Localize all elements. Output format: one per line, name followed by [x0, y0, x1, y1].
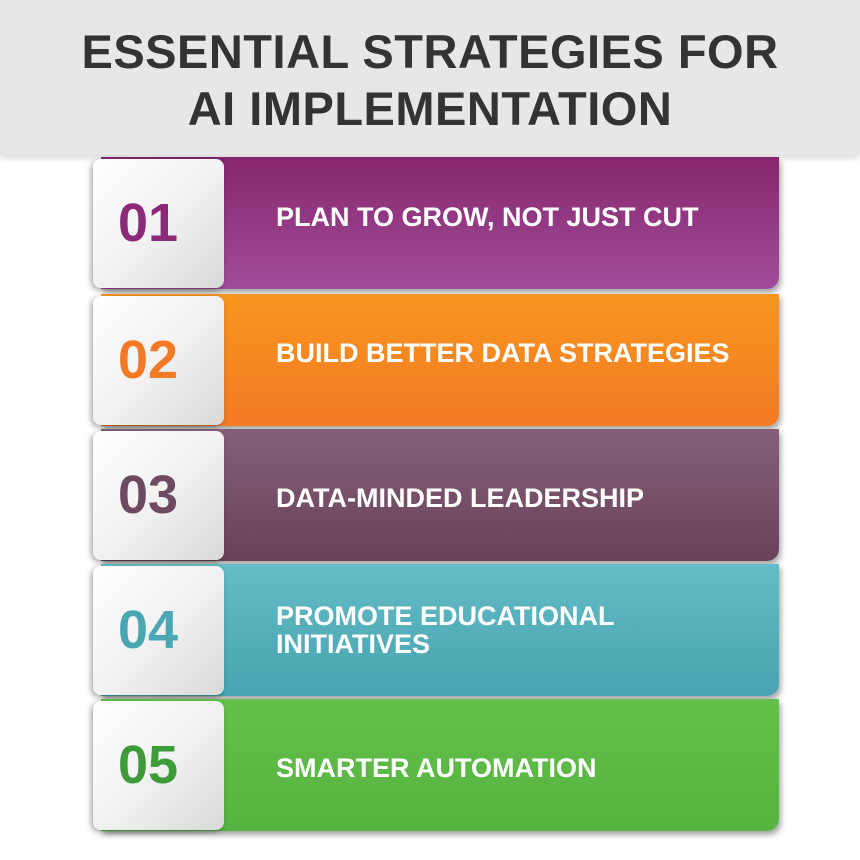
step 05 — [88, 699, 784, 838]
label 02: BUILD BETTER DATA STRATEGIES — [276, 338, 730, 368]
title: AI IMPLEMENTATION — [188, 82, 672, 135]
step 02 — [88, 294, 784, 431]
number box 04: 04 — [118, 600, 178, 660]
number box 03: 03 — [118, 465, 178, 525]
title — [81, 25, 779, 135]
bar 05 — [101, 699, 779, 831]
number box 01 — [93, 159, 224, 288]
number box 04 — [93, 566, 224, 695]
bar 03 — [101, 429, 779, 561]
number box 01: 01 — [118, 193, 178, 253]
bar 01 — [101, 157, 779, 289]
step 04 — [88, 564, 784, 701]
label 04: INITIATIVES — [276, 629, 430, 659]
title: ESSENTIAL STRATEGIES FOR — [81, 25, 779, 78]
number box 05: 05 — [118, 735, 178, 795]
header band — [0, 0, 860, 155]
label 03: DATA-MINDED LEADERSHIP — [276, 483, 644, 513]
label 04 — [276, 601, 614, 659]
label 01: PLAN TO GROW, NOT JUST CUT — [276, 202, 699, 232]
label 04: PROMOTE EDUCATIONAL — [276, 601, 614, 631]
number box 02: 02 — [118, 330, 178, 390]
number box 03 — [93, 431, 224, 560]
step 03 — [88, 429, 784, 566]
bar 04 — [101, 564, 779, 696]
number box 02 — [93, 296, 224, 425]
step 01 — [88, 156, 784, 294]
bar 02 — [101, 294, 779, 426]
number box 05 — [93, 701, 224, 830]
label 05: SMARTER AUTOMATION — [276, 753, 596, 783]
